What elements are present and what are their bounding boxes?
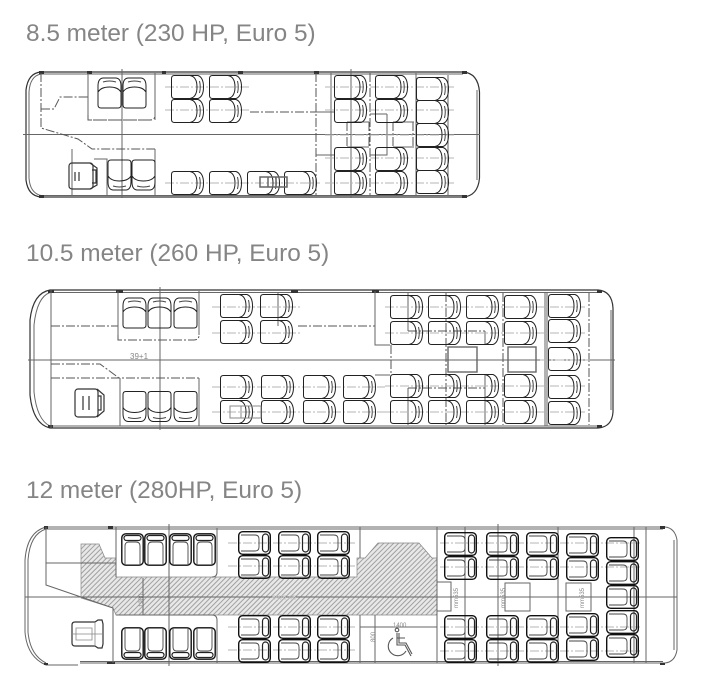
heading: 12 meter: 12 meter (280HP, Euro 5): [26, 477, 302, 504]
dimension labels: 5W6.45: [272, 595, 296, 602]
heading: 10.5 meter: 10.5 meter (260 HP, Euro 5): [26, 240, 329, 267]
aisle hatching: [81, 543, 437, 615]
dimension labels: 1900: [139, 593, 145, 607]
floor plan: 10.5 meter bus: [28, 287, 615, 430]
structure lines: [28, 287, 615, 430]
floor plan: 8.5 meter bus: [23, 69, 480, 198]
passenger seats: [172, 76, 448, 194]
seat capacity label: 39+1: [130, 352, 149, 361]
dimension labels: 1400: [393, 623, 407, 629]
passenger seats: [239, 532, 638, 662]
dimension labels: mm535: [454, 587, 460, 608]
front seats: [98, 78, 155, 190]
driver seat: [75, 389, 104, 417]
dimension labels: mm535: [580, 587, 586, 608]
dimension labels: 800: [371, 631, 377, 642]
floor plan: 12 meter bus: [25, 524, 677, 666]
dimension labels: mm535: [501, 587, 507, 608]
floor hatch marker: [260, 177, 287, 187]
driver seat: [72, 620, 103, 648]
dimension labels: [139, 587, 586, 642]
bus body outline: [30, 290, 613, 428]
structure lines: [25, 524, 677, 666]
bus body outline: [25, 526, 677, 665]
driver seat: [69, 163, 97, 189]
icon: wheelchair: [388, 628, 412, 656]
bus body outline: [26, 71, 480, 198]
passenger seats: [220, 294, 580, 424]
floor hatches: [230, 347, 536, 418]
heading: 8.5 meter: 8.5 meter (230 HP, Euro 5): [26, 20, 316, 47]
structure lines: [23, 69, 480, 198]
front seats: [123, 298, 197, 422]
front seats: [122, 534, 215, 659]
